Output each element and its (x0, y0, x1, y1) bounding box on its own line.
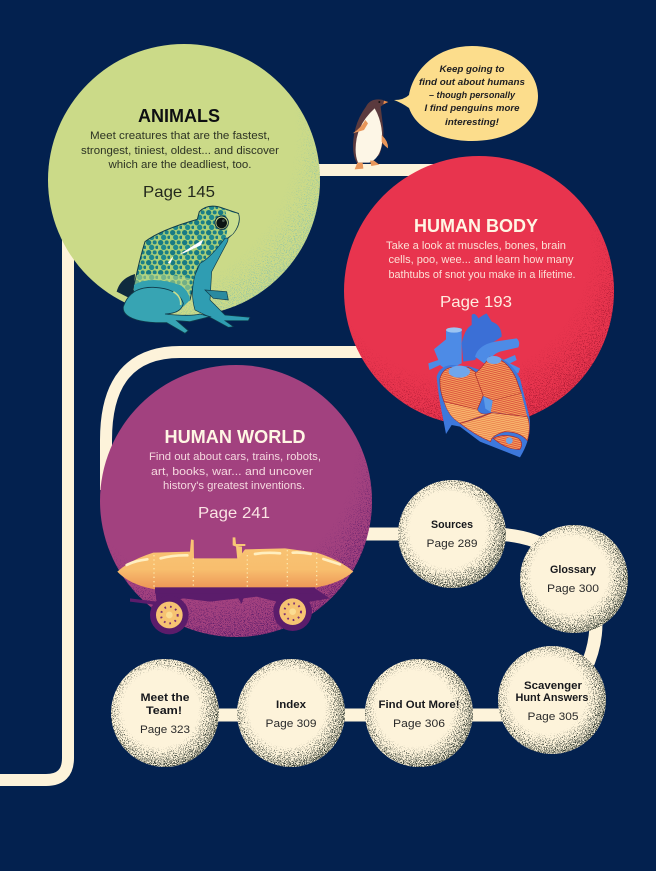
text: human world description: Find out about cars, trains, robots, (149, 451, 321, 463)
stop: meet the team: Meet the (140, 692, 190, 704)
text: human body description: Take a look at muscles, bones, brain (386, 240, 566, 252)
text: penguin quote: – though personally (429, 90, 516, 101)
text: human world description: history's greatest inventions. (163, 480, 305, 492)
text: penguin quote: Keep going to (440, 64, 505, 75)
text: human body description: cells, poo, wee... and learn how many (388, 254, 574, 266)
stop: sources (398, 480, 506, 588)
stop: meet the team: Page 323 (140, 724, 190, 736)
stop: scavenger hunt answers: Page 305 (528, 711, 578, 723)
text: human world description (149, 451, 321, 492)
stop: index: Page 309 (266, 718, 316, 730)
panel: human world (100, 365, 372, 637)
stop: find out more (365, 659, 473, 767)
stop: find out more: Find Out More! (378, 699, 460, 711)
stop: index (237, 659, 345, 767)
text: penguin quote: interesting! (445, 117, 500, 128)
stop: glossary: Glossary (550, 564, 597, 576)
text: human world page: Page 241 (198, 505, 270, 522)
text: human world description: art, books, war... and uncover (151, 466, 313, 478)
icon: penguin (353, 99, 388, 169)
stop: find out more: Page 306 (393, 718, 445, 730)
icon: electric car (117, 537, 353, 634)
path: bottom row connector (165, 708, 552, 722)
text: animals description: which are the deadliest, too. (107, 159, 252, 171)
stop: sources: Sources (431, 519, 473, 531)
path: human body to human world (106, 352, 370, 490)
icon: heart (428, 313, 530, 457)
text: human body page: Page 193 (440, 294, 512, 311)
text: human body description (386, 240, 576, 281)
text: penguin quote: find out about humans (419, 77, 525, 88)
stop: scavenger hunt answers (498, 646, 606, 754)
heading: human world: HUMAN WORLD (164, 427, 306, 447)
panel: animals (48, 44, 320, 316)
stop: scavenger hunt answers: Scavenger (524, 680, 583, 692)
text: human body description: bathtubs of snot you make in a lifetime. (388, 269, 576, 281)
heading: animals: ANIMALS (138, 106, 220, 126)
text: animals description (81, 130, 279, 171)
stop: glossary: Page 300 (547, 583, 599, 595)
speech bubble (394, 46, 538, 141)
path: main route from bottom left up to the human body circle (0, 170, 440, 780)
stop: sources: Page 289 (426, 538, 478, 550)
stop: meet the team: Team! (146, 705, 182, 717)
stop: meet the team (111, 659, 219, 767)
text: penguin quote: I find penguins more (424, 103, 520, 114)
panel: human body (344, 156, 614, 426)
heading: human body: HUMAN BODY (414, 216, 538, 236)
text: penguin quote (419, 64, 525, 128)
stop: scavenger hunt answers: Hunt Answers (516, 692, 588, 704)
text: animals description: Meet creatures that are the fastest, (90, 130, 270, 142)
text: animals page: Page 145 (143, 184, 215, 201)
text: animals description: strongest, tiniest, oldest... and discover (81, 145, 279, 157)
path: human world through sources and glossary (360, 534, 596, 670)
stop: glossary (520, 525, 628, 633)
icon: frog (117, 206, 250, 333)
stop: index: Index (276, 699, 307, 711)
